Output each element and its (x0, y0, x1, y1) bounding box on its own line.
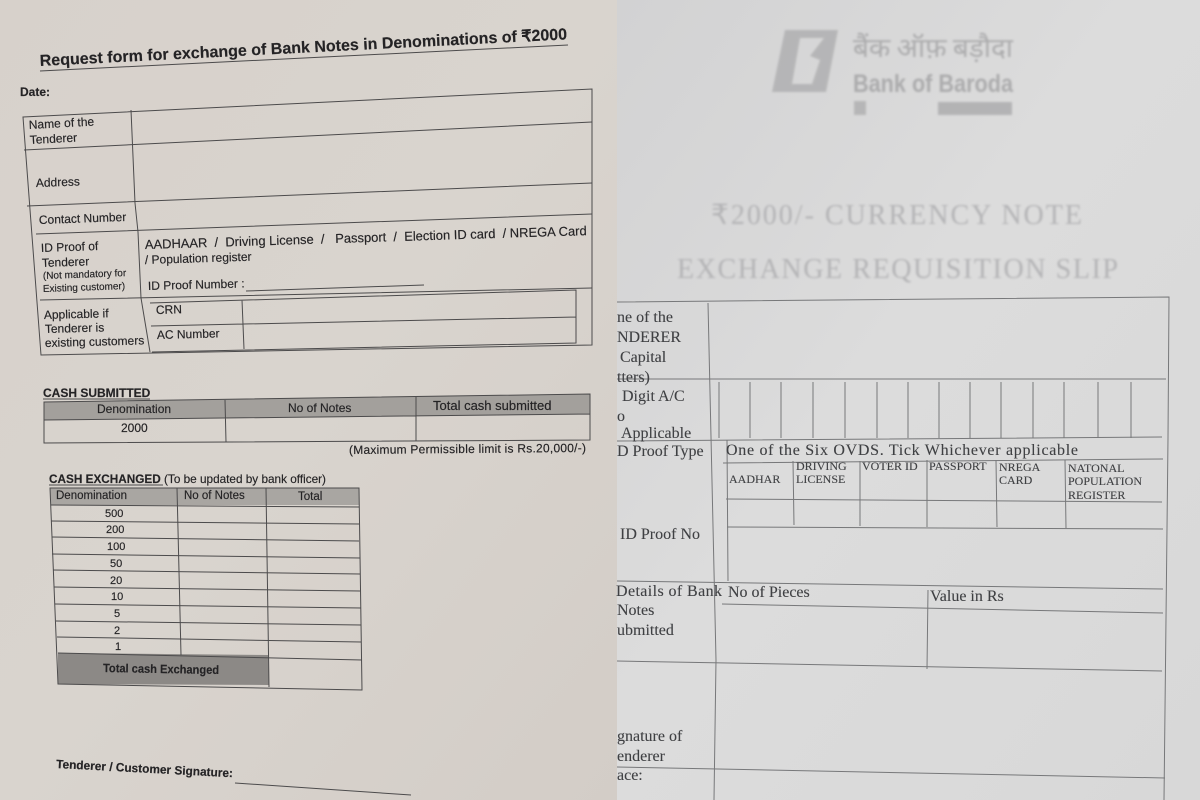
tenderer details table: Applicable if (44, 306, 109, 322)
cash submitted table: Total cash submitted (433, 398, 552, 413)
requisition table: VOTER ID (862, 459, 918, 473)
tenderer details table: ID Proof Number : (148, 276, 245, 293)
cash exchanged table: Total (298, 491, 322, 503)
cash exchanged table: 20 (110, 575, 122, 587)
panel: left form (0, 0, 617, 800)
signature line: Tenderer / Customer Signature: (56, 757, 233, 780)
tenderer details table: Existing customer) (43, 281, 125, 295)
tenderer details table: ID Proof of (41, 239, 99, 255)
requisition table: ubmitted (617, 622, 674, 639)
cash exchanged table: Total cash Exchanged (103, 661, 219, 677)
requisition table: POPULATION (1068, 474, 1142, 488)
logo: Bank of Baroda (772, 26, 1014, 115)
tenderer details table: AADHAAR / Driving License / Passport / Election ID card / NREGA Card (145, 223, 587, 252)
requisition table: gnature of (617, 728, 683, 745)
cash exchanged table: CASH EXCHANGED (To be updated by bank officer) (49, 472, 326, 486)
requisition table: Notes (617, 602, 654, 619)
tenderer details table: existing customers (45, 333, 144, 350)
tenderer details table: Tenderer (29, 131, 77, 147)
cash exchanged table: Denomination (56, 490, 127, 502)
date label: Date: (20, 85, 50, 99)
logo: Bank of Baroda: Bank of Baroda (853, 70, 1014, 98)
requisition table: Applicable (621, 425, 691, 442)
tenderer details table: Tenderer is (45, 320, 104, 336)
signature line (56, 757, 411, 795)
cash exchanged table: 500 (105, 508, 123, 520)
tenderer details table: (Not mandatory for (43, 268, 127, 282)
requisition table: NREGA (999, 460, 1041, 474)
requisition table: D Proof Type (617, 443, 704, 460)
title: Request form for exchange of Bank Notes in Denominations of ₹2000 (39, 26, 568, 70)
tenderer details table: CRN (156, 302, 182, 317)
cash exchanged table (49, 472, 362, 690)
requisition table: ID Proof No (620, 526, 700, 543)
requisition table: NDERER (617, 329, 681, 346)
requisition table: Value in Rs (930, 588, 1004, 605)
requisition table: PASSPORT (929, 459, 987, 473)
tenderer details table: Tenderer (42, 254, 89, 270)
requisition table: One of the Six OVDS. Tick Whichever applicable (726, 442, 1078, 459)
cash submitted table: CASH SUBMITTED (43, 386, 151, 400)
cash submitted table: 2000 (121, 421, 148, 435)
requisition table: ace: (617, 767, 643, 784)
requisition table: DRIVING (796, 459, 847, 473)
faded heading: EXCHANGE REQUISITION SLIP (677, 254, 1118, 285)
requisition table: Capital (620, 349, 667, 366)
tenderer details table: Contact Number (39, 210, 126, 227)
tenderer details table: AC Number (157, 326, 220, 342)
cash exchanged table: 200 (106, 524, 124, 536)
panel: right form (616, 0, 1200, 800)
requisition table: LICENSE (796, 472, 845, 486)
requisition table: CARD (999, 473, 1033, 487)
cash submitted table (43, 386, 590, 457)
logo: Bank of Baroda: बैंक ऑफ़ बड़ौदा (853, 26, 1014, 65)
requisition table: No of Pieces (728, 584, 810, 601)
tenderer details table: Address (36, 174, 80, 190)
cash submitted table: Denomination (97, 402, 171, 416)
cash submitted table: No of Notes (288, 401, 351, 415)
tenderer details table (23, 89, 592, 355)
tenderer details table: Name of the (28, 115, 95, 132)
cash exchanged table: 10 (111, 591, 123, 603)
requisition table: enderer (617, 748, 666, 765)
cash exchanged table: No of Notes (184, 490, 245, 502)
requisition table: NATONAL (1068, 461, 1124, 475)
requisition table (616, 297, 1169, 800)
requisition table: o (617, 408, 625, 425)
requisition table: REGISTER (1068, 488, 1125, 502)
requisition table: AADHAR (729, 472, 780, 486)
cash exchanged table: 5 (114, 608, 120, 620)
requisition table: tters) (617, 369, 650, 386)
faded heading: ₹2000/- CURRENCY NOTE (711, 200, 1082, 231)
cash exchanged table: 2 (114, 625, 120, 637)
cash exchanged table: 50 (110, 558, 122, 570)
cash submitted table: (Maximum Permissible limit is Rs.20,000/-) (349, 441, 586, 457)
cash exchanged table: 1 (115, 641, 121, 653)
faded heading (677, 200, 1118, 285)
cash exchanged table: 100 (107, 541, 125, 553)
tenderer details table: / Population register (145, 250, 252, 267)
requisition table: Digit A/C (622, 388, 685, 405)
requisition table: ne of the (617, 309, 673, 326)
requisition table: Details of Bank (616, 583, 722, 600)
